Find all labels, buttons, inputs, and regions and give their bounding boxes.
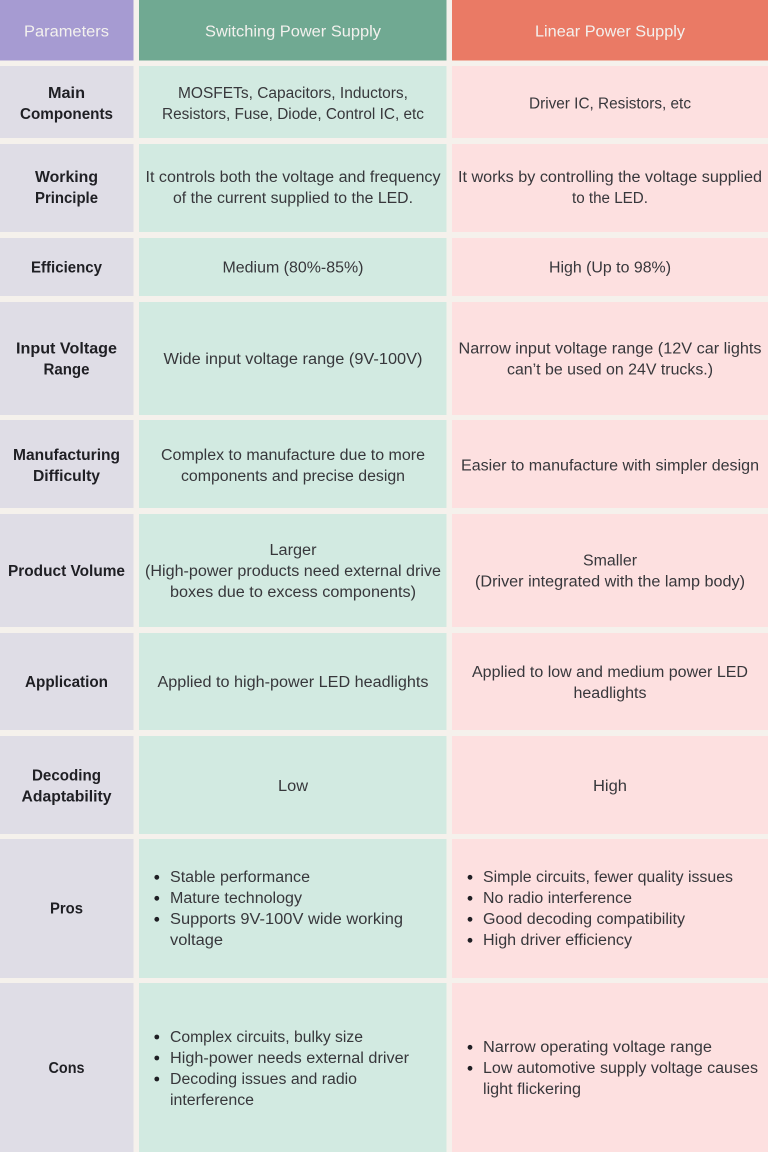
row: Manufacturing Difficulty: Easier to manufacture with simpler design [461, 458, 759, 474]
row: Pros: Simple circuits, fewer quality issues [483, 869, 733, 886]
row: Manufacturing Difficulty: components and precise design [181, 468, 405, 485]
row: Pros: Pros [50, 900, 83, 918]
row: Efficiency: Efficiency [31, 260, 102, 276]
row: Pros: High driver efficiency [483, 932, 632, 949]
row: Main Components: Main [48, 85, 85, 102]
row: Efficiency: Medium (80%-85%) [222, 260, 364, 276]
row: Efficiency: High (Up to 98%) [549, 260, 671, 276]
row: Input Voltage Range: Narrow input voltage range (12V car lights [458, 340, 762, 358]
row: Main Components [0, 66, 768, 138]
row: Cons: Cons [48, 1060, 84, 1077]
row: Main Components: Components [20, 106, 113, 123]
row: Decoding Adaptability: High [593, 778, 627, 795]
row: Pros: Supports 9V-100V wide working [170, 911, 403, 928]
row: Efficiency [0, 238, 768, 296]
row: Main Components: MOSFETs, Capacitors, Inductors, [178, 85, 408, 102]
row: Cons: High-power needs external driver [170, 1050, 409, 1067]
row: Working Principle: of the current supplied to the LED. [173, 190, 413, 207]
row: Product Volume: boxes due to excess components) [170, 584, 416, 601]
row: Application [0, 633, 768, 730]
row: Pros: voltage [170, 932, 223, 949]
row: Product Volume: Product Volume [8, 563, 125, 580]
row: Application: Applied to high-power LED headlights [158, 674, 429, 691]
row: Decoding Adaptability: Low [278, 778, 309, 795]
row: Product Volume: (High-power products need external drive [145, 563, 441, 580]
row: Working Principle: It controls both the voltage and frequency [146, 169, 441, 186]
row: Working Principle: to the LED. [572, 190, 648, 207]
row: Working Principle: Working [35, 169, 98, 186]
row: Application: Applied to low and medium power LED [472, 664, 748, 681]
row: Decoding Adaptability: Adaptability [22, 788, 112, 806]
row: Working Principle [0, 144, 768, 232]
row: Application: headlights [574, 685, 647, 702]
header row [0, 0, 768, 60]
row: Main Components: Resistors, Fuse, Diode, Control IC, etc [162, 106, 424, 123]
row: Cons: Decoding issues and radio [170, 1071, 357, 1088]
row: Product Volume: (Driver integrated with the lamp body) [475, 574, 745, 590]
header: Parameters [0, 0, 134, 60]
row: Cons: Complex circuits, bulky size [170, 1029, 363, 1046]
row: Pros [0, 839, 768, 978]
header: Linear Power Supply: Linear Power Supply [535, 24, 685, 40]
row: Manufacturing Difficulty [0, 420, 768, 508]
row: Input Voltage Range: Wide input voltage range (9V-100V) [164, 351, 422, 368]
row: Main Components: Driver IC, Resistors, etc [529, 96, 691, 112]
row: Input Voltage Range: Input Voltage [16, 340, 117, 358]
row: Manufacturing Difficulty: Manufacturing [13, 447, 120, 464]
row: Cons [0, 983, 768, 1152]
row: Cons: light flickering [483, 1081, 581, 1098]
row: Cons: interference [170, 1092, 254, 1109]
row: Input Voltage Range: Range [44, 362, 90, 378]
row: Pros: No radio interference [483, 890, 632, 907]
header: Linear Power Supply [452, 0, 768, 60]
row: Manufacturing Difficulty: Complex to manufacture due to more [161, 447, 425, 464]
row: Pros: Mature technology [170, 890, 302, 907]
row: Input Voltage Range: can’t be used on 24V trucks.) [507, 362, 713, 378]
row: Cons: Narrow operating voltage range [483, 1039, 712, 1056]
header: Parameters: Parameters [24, 24, 109, 40]
row: Cons: Low automotive supply voltage causes [483, 1060, 758, 1077]
row: Product Volume: Smaller [583, 552, 637, 570]
row: Input Voltage Range [0, 302, 768, 415]
row: Manufacturing Difficulty: Difficulty [33, 468, 100, 485]
row: Working Principle: Principle [35, 190, 98, 207]
row: Application: Application [25, 674, 108, 691]
row: Decoding Adaptability [0, 736, 768, 834]
row: Product Volume: Larger [270, 542, 316, 559]
row: Pros: Good decoding compatibility [483, 911, 685, 928]
header: Switching Power Supply: Switching Power Supply [205, 24, 381, 40]
row: Product Volume [0, 514, 768, 627]
row: Decoding Adaptability: Decoding [32, 768, 101, 784]
row: Working Principle: It works by controlling the voltage supplied [458, 169, 762, 186]
row: Pros: Stable performance [170, 869, 310, 886]
header: Switching Power Supply [139, 0, 446, 60]
